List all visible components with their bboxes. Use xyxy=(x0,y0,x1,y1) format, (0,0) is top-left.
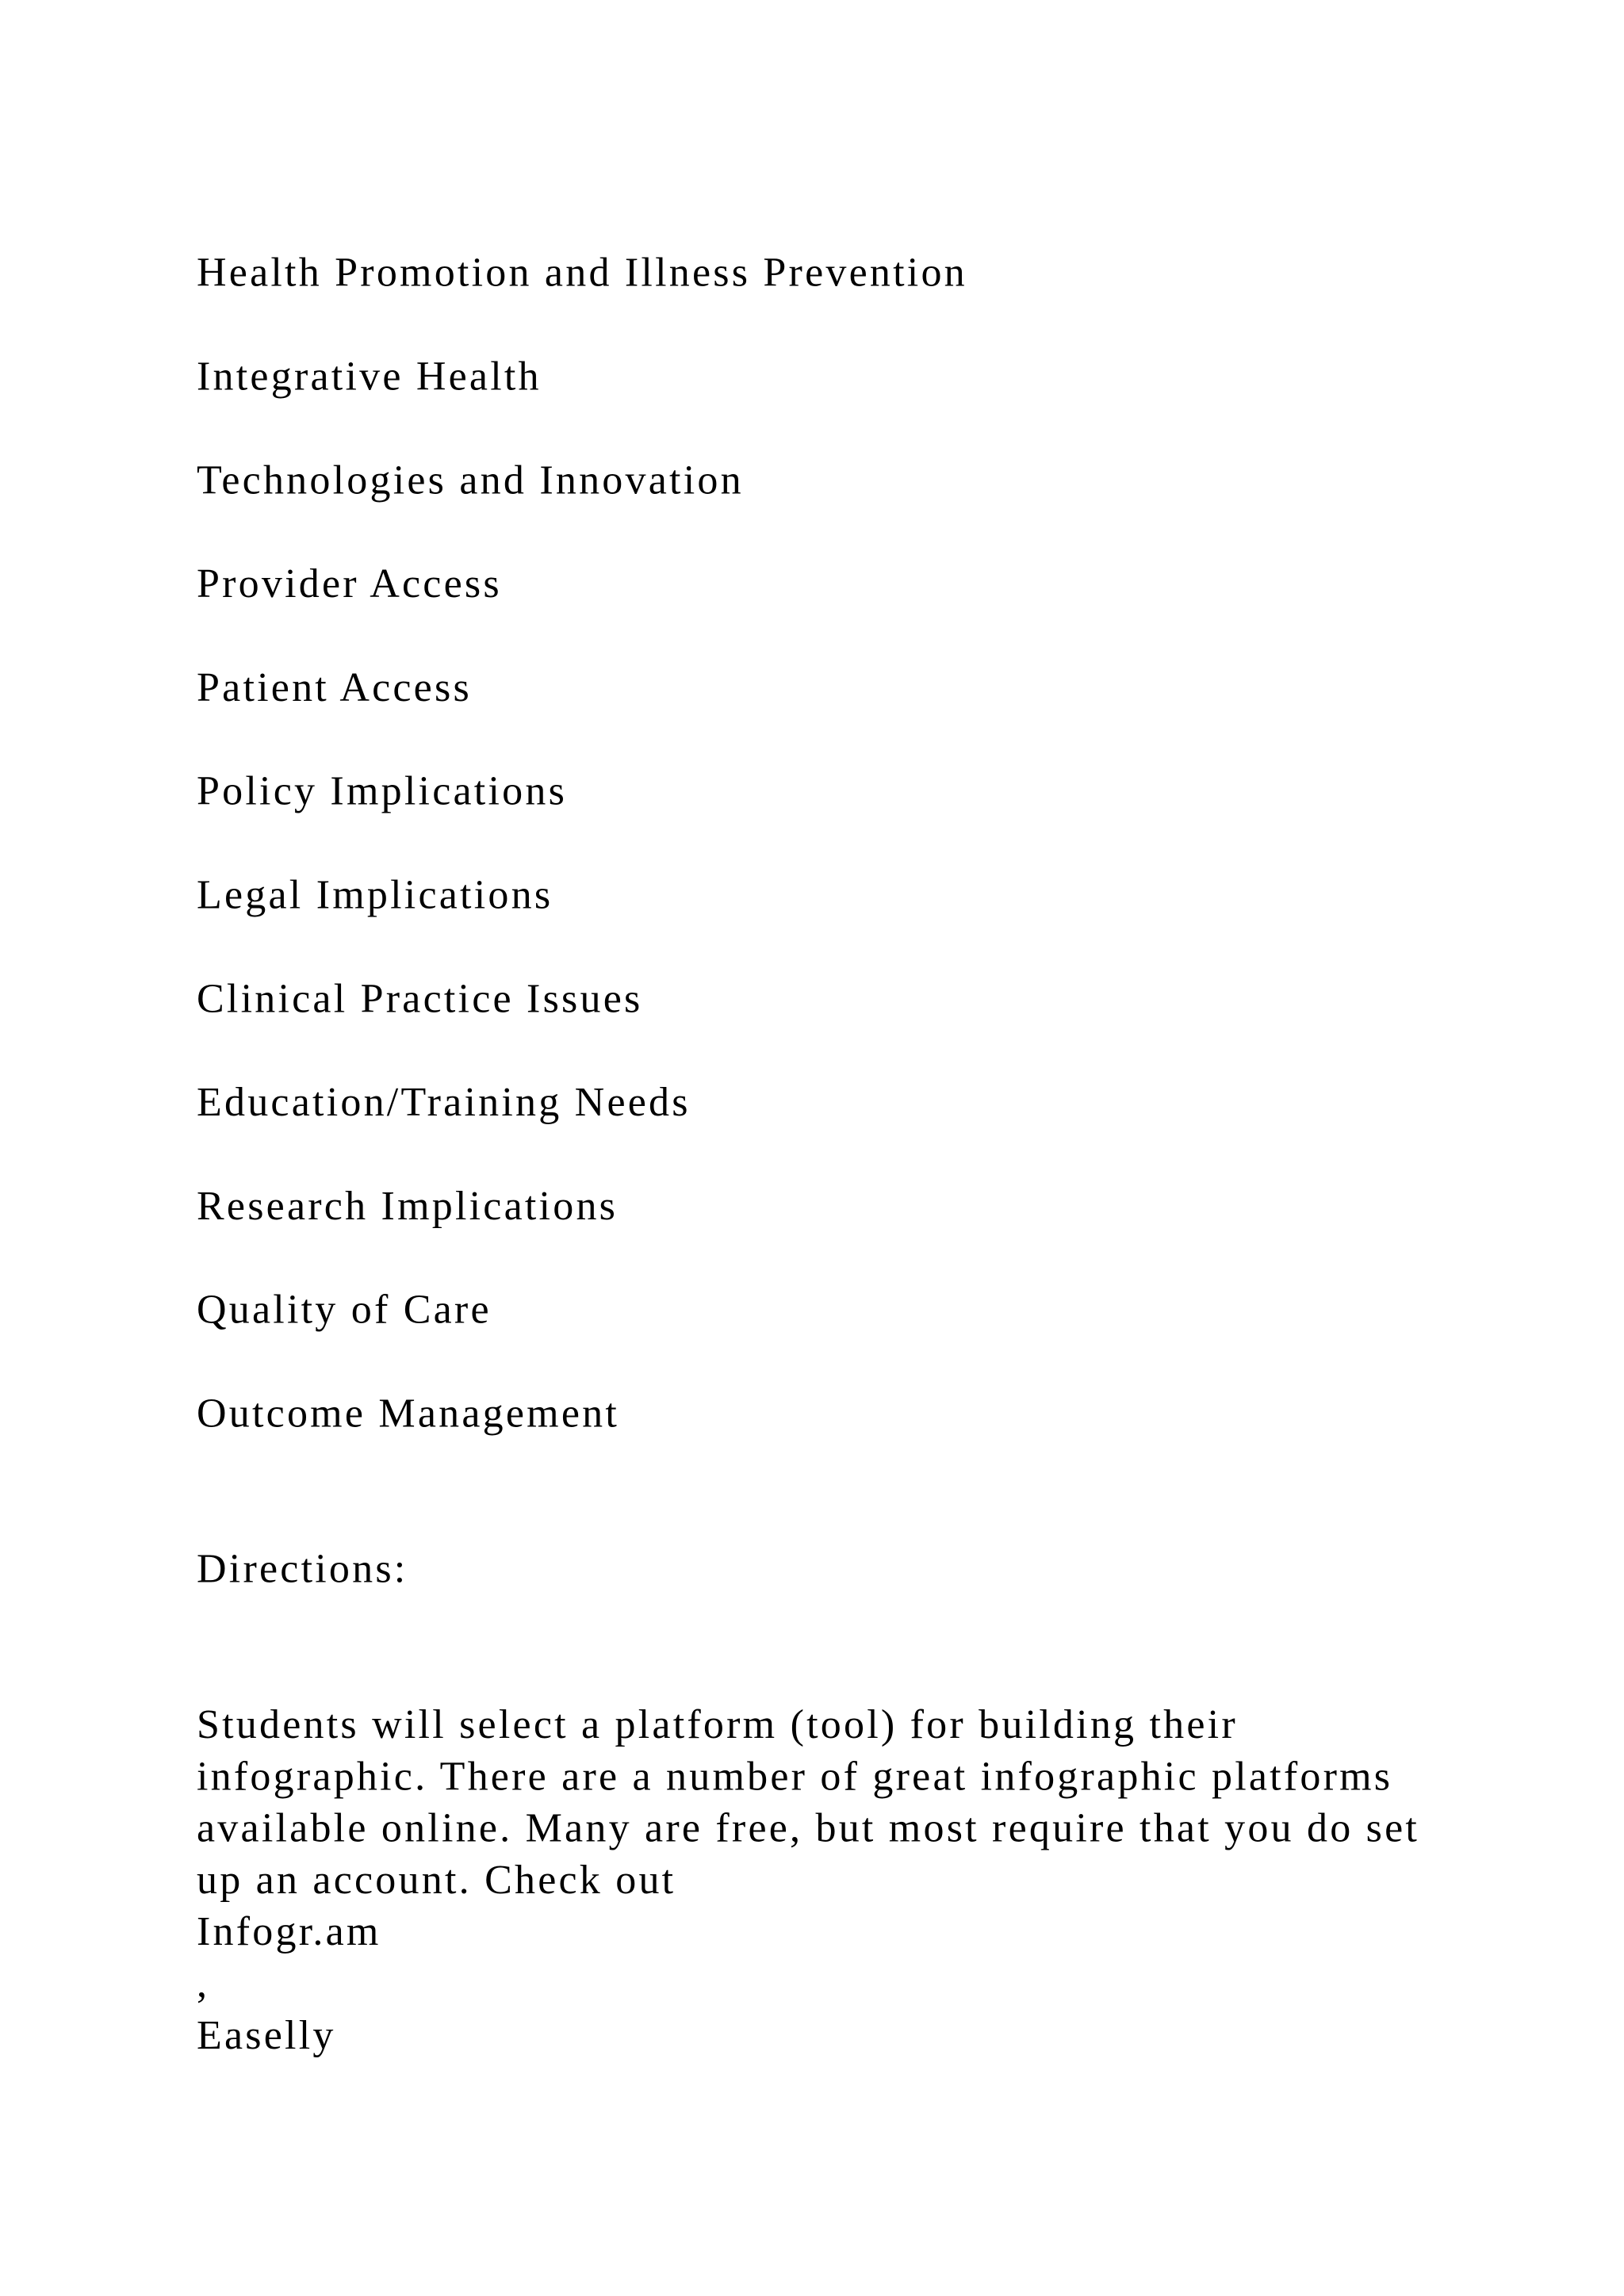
topic: Quality of Care: Quality of Care xyxy=(197,1288,492,1333)
topic: Outcome Management: Outcome Management xyxy=(197,1391,619,1436)
topic: Clinical Practice Issues: Clinical Practice Issues xyxy=(197,976,642,1021)
comma: , xyxy=(197,1961,209,2006)
topic list xyxy=(197,251,967,1436)
topic: Technologies and Innovation: Technologies and Innovation xyxy=(197,457,744,503)
topic: Policy Implications: Policy Implications xyxy=(197,769,567,814)
topic: Education/Training Needs: Education/Training Needs xyxy=(197,1080,691,1125)
heading: Directions: Directions: xyxy=(197,1547,408,1592)
link text: Infogr.am: Infogr.am xyxy=(197,1909,381,1954)
topic: Patient Access: Patient Access xyxy=(197,665,472,710)
topic: Integrative Health: Integrative Health xyxy=(197,354,542,400)
topic: Health Promotion and Illness Prevention: Health Promotion and Illness Prevention xyxy=(197,251,967,296)
paragraph line 3: available online. Many are free, but most require that you do set xyxy=(197,1806,1419,1851)
topic: Provider Access: Provider Access xyxy=(197,561,502,607)
paragraph line 4: up an account. Check out xyxy=(197,1858,676,1903)
paragraph line 1: Students will select a platform (tool) for building their xyxy=(197,1702,1238,1747)
link text: Easelly: Easelly xyxy=(197,2013,336,2058)
topic: Legal Implications: Legal Implications xyxy=(197,872,553,918)
paragraph line 2: infographic. There are a number of great infographic platforms xyxy=(197,1754,1392,1799)
directions paragraph xyxy=(197,1702,1419,2058)
topic: Research Implications: Research Implications xyxy=(197,1184,618,1229)
